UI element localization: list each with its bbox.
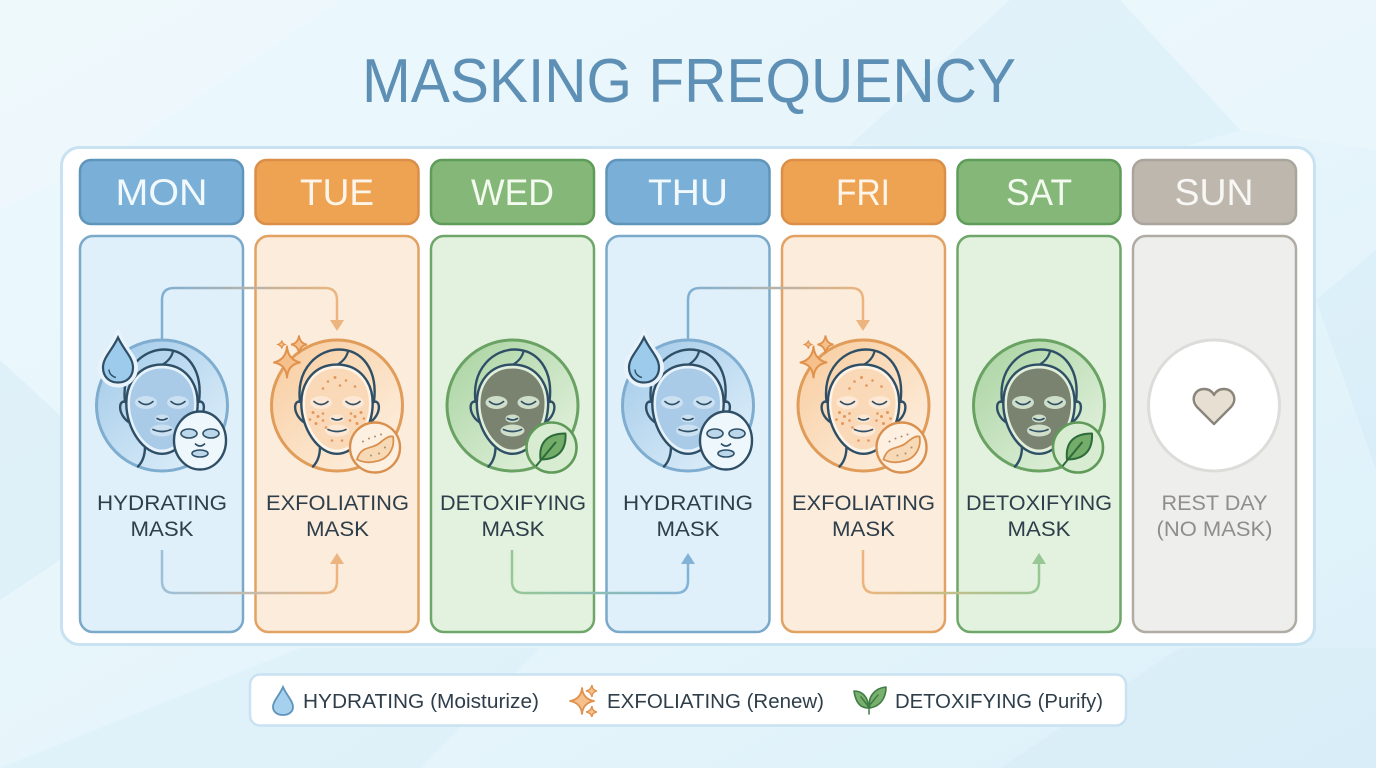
day card	[782, 236, 945, 632]
day header: THU: THU	[648, 172, 728, 213]
day card	[606, 236, 770, 632]
label: hydrating mask	[97, 491, 227, 541]
arrow: Monday to Tuesday upper	[162, 288, 344, 340]
icon: detoxifying face	[974, 340, 1104, 472]
label: detoxifying mask	[440, 491, 586, 541]
legend item: detoxifying: DETOXIFYING (Purify)	[895, 691, 1103, 713]
label: detoxifying mask: DETOXIFYING	[966, 491, 1112, 515]
label: exfoliating mask	[266, 491, 409, 541]
column: Monday	[80, 160, 243, 632]
legend	[250, 674, 1126, 726]
day header: SAT	[958, 160, 1120, 224]
column: Sunday	[1133, 160, 1296, 632]
label: exfoliating mask: EXFOLIATING	[266, 491, 409, 515]
day header: TUE: TUE	[300, 172, 374, 213]
label: exfoliating mask	[792, 491, 935, 541]
legend item: hydrating: HYDRATING (Moisturize)	[303, 691, 539, 713]
panel: weekly schedule	[62, 148, 1314, 644]
icon: rest heart	[1148, 340, 1280, 471]
label: detoxifying mask: MASK	[482, 517, 545, 541]
day header: FRI: FRI	[836, 172, 890, 213]
column: Wednesday	[431, 160, 594, 632]
day header: WED: WED	[471, 172, 554, 213]
column: Friday	[782, 160, 945, 632]
label: rest day: (NO MASK)	[1156, 517, 1272, 541]
day header: MON: MON	[116, 172, 208, 213]
day header: THU	[606, 160, 770, 224]
day card	[80, 236, 243, 632]
label: rest day	[1156, 491, 1272, 541]
icon: detoxifying face	[447, 340, 578, 472]
icon: exfoliating face	[798, 336, 929, 472]
icon: hydrating face	[622, 338, 754, 471]
day card	[256, 236, 418, 632]
label: hydrating mask: HYDRATING	[623, 491, 753, 515]
day header: WED	[431, 160, 594, 224]
arrow: Thursday to Friday upper	[688, 288, 870, 340]
day header: MON	[80, 160, 243, 224]
legend item: hydrating	[273, 687, 539, 715]
day card	[1133, 236, 1296, 632]
label: exfoliating mask: EXFOLIATING	[792, 491, 935, 515]
icon: exfoliating face	[272, 336, 402, 472]
legend item: detoxifying	[854, 687, 1103, 714]
arrow: Monday to Tuesday lower	[162, 550, 344, 593]
arrow: Wednesday to Thursday lower	[512, 550, 695, 593]
label: hydrating mask: MASK	[130, 517, 194, 541]
day header: SUN: SUN	[1174, 172, 1254, 213]
column: Tuesday	[256, 160, 418, 632]
day header: FRI	[782, 160, 945, 224]
column: Thursday	[606, 160, 770, 632]
column: Saturday	[958, 160, 1120, 632]
legend item: exfoliating: EXFOLIATING (Renew)	[607, 691, 824, 713]
label: rest day: REST DAY	[1162, 491, 1268, 515]
label: exfoliating mask: MASK	[306, 517, 370, 541]
day header: TUE	[256, 160, 418, 224]
day header: SUN	[1133, 160, 1296, 224]
label: hydrating mask: HYDRATING	[97, 491, 227, 515]
label: exfoliating mask: MASK	[832, 517, 896, 541]
label: detoxifying mask	[966, 491, 1112, 541]
arrow: Friday to Saturday lower	[863, 550, 1046, 593]
icon: hydrating face	[96, 338, 228, 471]
day card	[958, 236, 1120, 632]
label: hydrating mask: MASK	[656, 517, 720, 541]
day card	[431, 236, 594, 632]
day header: SAT: SAT	[1006, 172, 1072, 213]
label: detoxifying mask: MASK	[1008, 517, 1071, 541]
label: hydrating mask	[623, 491, 753, 541]
label: detoxifying mask: DETOXIFYING	[440, 491, 586, 515]
title: MASKING FREQUENCY	[362, 47, 1016, 116]
legend item: exfoliating	[570, 685, 824, 717]
